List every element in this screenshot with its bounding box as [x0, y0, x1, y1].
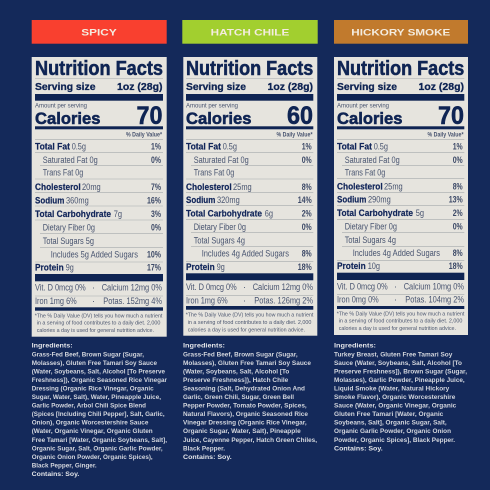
panel: spicy nutrition facts: 10%: [147, 249, 161, 259]
panel: hatch chile nutrition facts: Vit. D 0mcg 0%: [186, 282, 237, 292]
panel: spicy nutrition facts: [32, 57, 167, 337]
panel: spicy nutrition facts: Total Sugars 5g: [43, 236, 94, 246]
panel: hickory smoke nutrition facts: Total Fat: [337, 141, 372, 151]
panel: hickory smoke nutrition facts: 8%: [453, 248, 463, 258]
panel: spicy nutrition facts: 360mg: [66, 195, 89, 205]
panel: hatch chile nutrition facts: Total Fat: [186, 141, 221, 151]
panel: hatch chile nutrition facts: 320mg: [217, 195, 240, 205]
banner: hickory smoke: HICKORY SMOKE: [351, 28, 451, 39]
footnote: calories a day is used for general nutrition advice.: [37, 328, 154, 334]
panel: spicy nutrition facts: 17%: [147, 263, 161, 273]
panel: hatch chile nutrition facts: Amount per serving: [186, 104, 238, 110]
calories: 70: [136, 102, 162, 130]
serving size: 1oz (28g): [268, 81, 313, 93]
ingredients: spicy: [32, 343, 167, 478]
panel: hickory smoke nutrition facts: Total Carbohydrate: [337, 208, 413, 218]
banner: spicy: [32, 20, 167, 44]
ingredients: hickory smoke: Gluten Free Tamari [Water, Organic: [334, 411, 444, 418]
panel: hickory smoke nutrition facts: Trans Fat 0g: [345, 168, 385, 178]
panel: spicy nutrition facts: Trans Fat 0g: [43, 168, 83, 178]
panel: hickory smoke nutrition facts: 18%: [449, 261, 463, 271]
panel: hatch chile nutrition facts: Total Sugars 4g: [194, 235, 245, 245]
ingredients: hatch chile: Seasoning (Salt, Dehydrated Onion And: [183, 386, 305, 392]
panel: spicy nutrition facts: 9g: [66, 263, 74, 273]
ingredients: hickory smoke: Liquid Smoke (Water, Natural Hickory: [334, 386, 449, 392]
ingredients: spicy: Organic Onion Powder, Organic Spices),: [32, 454, 153, 461]
panel: hickory smoke nutrition facts: Saturated Fat 0g: [345, 155, 400, 165]
panel: hickory smoke nutrition facts: Vit. D 0mcg 0%: [337, 281, 388, 291]
panel: spicy nutrition facts: 1%: [151, 141, 161, 151]
panel: spicy nutrition facts: Cholesterol: [35, 182, 81, 192]
ingredients: hatch chile: Vinegar Dressing (Organic Rice Vinegar,: [183, 420, 307, 427]
calories: 70: [438, 102, 464, 130]
panel: spicy nutrition facts: Dietary Fiber 0g: [43, 223, 95, 233]
panel: spicy nutrition facts: Potas. 152mg 4%: [103, 296, 162, 306]
panel: hatch chile nutrition facts: Saturated Fat 0g: [194, 155, 249, 165]
ingredients: hatch chile: Molasses), Gluten Free Tamari Soy Sauce: [183, 360, 311, 367]
serving size: Serving size: [337, 81, 397, 93]
panel: spicy nutrition facts: 7%: [151, 182, 161, 192]
banner: spicy: SPICY: [81, 28, 117, 39]
panel: spicy nutrition facts: Calcium 12mg 0%: [102, 283, 162, 293]
ingredients: hatch chile: Organic Sugar, Water, Salt), Pineapple: [183, 428, 301, 435]
ingredients: hickory smoke: Powder, Organic Spices], Black Pepper.: [334, 437, 455, 444]
footnote: in a serving of food contributes to a daily diet. 2,000: [339, 319, 462, 325]
ingredients: hickory smoke: [334, 343, 467, 452]
calories: 60: [287, 102, 313, 130]
ingredients: hickory smoke: Molasses), Garlic Powder, Pineapple Juice,: [334, 377, 465, 384]
panel: hickory smoke nutrition facts: Dietary Fiber 0g: [345, 222, 397, 232]
ingredients: spicy: Freshness]), Organic Seasoned Rice Vinegar: [32, 377, 167, 384]
calories: [35, 102, 162, 130]
panel: spicy nutrition facts: Protein: [35, 263, 64, 273]
panel: hickory smoke nutrition facts: % Daily Value*: [428, 133, 464, 139]
panel: hatch chile nutrition facts: Dietary Fiber 0g: [194, 222, 246, 232]
panel: hatch chile nutrition facts: ·: [243, 295, 246, 305]
panel: hickory smoke nutrition facts: Total Sugars 4g: [345, 235, 396, 245]
panel: hickory smoke nutrition facts: 13%: [449, 195, 463, 205]
ingredients: spicy: Grass-Fed Beef, Brown Sugar (Sugar,: [32, 351, 144, 358]
panel: hatch chile nutrition facts: 1%: [302, 141, 312, 151]
banner: hatch chile: [182, 20, 318, 44]
panel: hickory smoke nutrition facts: [334, 57, 468, 335]
calories: [186, 102, 313, 130]
panel: hatch chile nutrition facts: 18%: [298, 262, 312, 272]
ingredients: hatch chile: Black Pepper.: [183, 445, 225, 452]
ingredients: hickory smoke: Preserve Freshness]), Brown Sugar (Sugar,: [334, 368, 467, 375]
panel: spicy nutrition facts: 0%: [151, 223, 161, 233]
ingredients: spicy: (Water, Organic Vinegar, Organic Gluten: [32, 428, 153, 435]
panel: hatch chile nutrition facts: 0%: [302, 155, 312, 165]
panel: hickory smoke nutrition facts: Protein: [337, 261, 366, 271]
ingredients: spicy: Contains: Soy.: [32, 471, 79, 478]
panel: hickory smoke nutrition facts: Calcium 10mg 0%: [404, 281, 464, 291]
panel: spicy nutrition facts: Includes 5g Added Sugars: [51, 249, 138, 259]
ingredients: spicy: Garlic Powder, Arbol Chili Spice Blend: [32, 403, 146, 410]
panel: hatch chile nutrition facts: Iron 1mg 6%: [186, 295, 228, 305]
panel: hatch chile nutrition facts: [183, 57, 317, 336]
ingredients: spicy: Sugar, Water, Salt), Water, Pineapple Juice,: [32, 394, 161, 401]
footnote: calories a day is used for general nutrition advice.: [339, 326, 456, 332]
ingredients: hatch chile: (Water, Soybeans, Salt, Alcohol [To: [183, 368, 289, 375]
ingredients: spicy: Dressing (Organic Rice Vinegar, Organic: [32, 386, 154, 392]
panel: spicy nutrition facts: Iron 1mg 6%: [35, 296, 77, 306]
panel: hickory smoke nutrition facts: Potas. 104mg 2%: [405, 295, 464, 305]
ingredients: spicy: Molasses), Gluten Free Tamari Soy Sauce: [32, 360, 157, 367]
panel: hatch chile nutrition facts: Potas. 126mg 2%: [254, 295, 313, 305]
panel: hatch chile nutrition facts: 9g: [217, 262, 225, 272]
footnote: [35, 313, 163, 334]
banner: hickory smoke: [334, 20, 468, 44]
panel: hatch chile nutrition facts: 8%: [302, 249, 312, 259]
footnote: *The % Daily Value (DV) tells you how much a nutrient: [186, 313, 314, 319]
panel: hickory smoke nutrition facts: Cholesterol: [337, 182, 383, 192]
panel: spicy nutrition facts: Total Fat: [35, 141, 70, 151]
ingredients: spicy: Organic Sugar, Salt, Organic Garlic Powder,: [32, 445, 163, 452]
nutrition facts heading: Nutrition Facts: [186, 58, 313, 80]
panel: hatch chile nutrition facts: ·: [243, 282, 246, 292]
ingredients: hatch chile: Juice, Cayenne Pepper, Hatch Green Chiles,: [183, 437, 317, 444]
panel: hickory smoke nutrition facts: 25mg: [384, 182, 403, 192]
panel: hatch chile nutrition facts: Total Carbohydrate: [186, 209, 262, 219]
ingredients: hickory smoke: Soybeans, Salt], Organic Sugar, Salt,: [334, 420, 447, 427]
ingredients: hatch chile: Preserve Freshness]), Hatch Chile: [183, 377, 289, 384]
footnote: calories a day is used for general nutrition advice.: [188, 328, 305, 334]
panel: hatch chile nutrition facts: 8%: [302, 182, 312, 192]
ingredients: hickory smoke: Organic Garlic Powder, Organic Onion: [334, 428, 451, 435]
footnote: in a serving of food contributes to a daily diet. 2,000: [188, 320, 311, 326]
nutrition facts heading: Nutrition Facts: [337, 58, 464, 80]
serving size: 1oz (28g): [418, 81, 464, 93]
panel: spicy nutrition facts: 16%: [147, 195, 161, 205]
ingredients: hatch chile: Ingredients:: [183, 343, 225, 350]
panel: hatch chile nutrition facts: Trans Fat 0g: [194, 168, 234, 178]
panel: hatch chile nutrition facts: 14%: [298, 195, 312, 205]
calories: Calories: [337, 109, 402, 128]
serving size: Serving size: [35, 81, 96, 93]
ingredients: hatch chile: Natural Flavors), Organic Seasoned Rice: [183, 411, 308, 418]
panel: spicy nutrition facts: ·: [92, 296, 95, 306]
nutrition facts heading: Nutrition Facts: [35, 58, 163, 80]
panel: hickory smoke nutrition facts: 10g: [368, 261, 380, 271]
panel: hickory smoke nutrition facts: 290mg: [368, 195, 391, 205]
panel: spicy nutrition facts: ·: [92, 283, 95, 293]
banner: hatch chile: HATCH CHILE: [211, 28, 290, 39]
footnote: *The % Daily Value (DV) tells you how much a nutrient: [337, 311, 465, 317]
ingredients: spicy: (Spices [Including Chili Pepper], Salt, Garlic,: [32, 411, 165, 418]
panel: spicy nutrition facts: Saturated Fat 0g: [43, 155, 98, 165]
ingredients: spicy: Free Tamari [Water, Organic Soybeans, Salt],: [32, 437, 167, 444]
panel: hickory smoke nutrition facts: Sodium: [337, 195, 366, 205]
panel: hickory smoke nutrition facts: Includes 4g Added Sugars: [353, 248, 440, 258]
panel: spicy nutrition facts: Total Carbohydrate: [35, 209, 111, 219]
panel: hatch chile nutrition facts: 2%: [302, 209, 312, 219]
ingredients: hickory smoke: Smoke Flavor), Organic Worcestershire: [334, 394, 455, 401]
panel: spicy nutrition facts: 0%: [151, 155, 161, 165]
panel: spicy nutrition facts: 7g: [114, 209, 122, 219]
panel: hatch chile nutrition facts: % Daily Value*: [276, 133, 313, 139]
footnote: *The % Daily Value (DV) tells you how much a nutrient: [35, 313, 163, 319]
ingredients: hatch chile: Pepper Powder, Tomato Powder, Spices,: [183, 403, 307, 410]
ingredients: spicy: Onion), Organic Worcestershire Sauce: [32, 420, 149, 427]
panel: hickory smoke nutrition facts: Amount per serving: [337, 104, 389, 110]
ingredients: hickory smoke: Contains: Soy.: [334, 445, 383, 452]
serving size: 1oz (28g): [117, 81, 162, 93]
panel: hickory smoke nutrition facts: ·: [394, 295, 397, 305]
panel: spicy nutrition facts: Vit. D 0mcg 0%: [35, 283, 86, 293]
calories: [337, 102, 464, 130]
serving size: [186, 81, 313, 93]
panel: hatch chile nutrition facts: 0%: [302, 222, 312, 232]
panel: hickory smoke nutrition facts: 0%: [453, 222, 463, 232]
panel: hatch chile nutrition facts: 6g: [265, 209, 273, 219]
panel: hatch chile nutrition facts: Sodium: [186, 195, 215, 205]
panel: spicy nutrition facts: 20mg: [82, 182, 101, 192]
panel: hickory smoke nutrition facts: 0%: [453, 155, 463, 165]
calories: Calories: [35, 109, 100, 128]
ingredients: spicy: (Water, Soybeans, Salt, Alcohol [To Preserve: [32, 368, 165, 375]
panel: hatch chile nutrition facts: Cholesterol: [186, 182, 232, 192]
panel: hickory smoke nutrition facts: Iron 0mg 0%: [337, 295, 379, 305]
panel: hatch chile nutrition facts: 0.5g: [223, 141, 237, 151]
calories: Calories: [186, 109, 252, 128]
ingredients: hickory smoke: Turkey Breast, Gluten Free Tamari Soy: [334, 351, 453, 358]
panel: hickory smoke nutrition facts: 5g: [416, 208, 424, 218]
ingredients: spicy: Ingredients:: [32, 343, 73, 350]
ingredients: hatch chile: Grass-Fed Beef, Brown Sugar (Sugar,: [183, 351, 298, 358]
panel: hickory smoke nutrition facts: 8%: [453, 182, 463, 192]
panel: spicy nutrition facts: Amount per serving: [35, 104, 87, 110]
panel: spicy nutrition facts: Sodium: [35, 195, 64, 205]
ingredients: hatch chile: Contains: Soy.: [183, 454, 232, 461]
panel: spicy nutrition facts: % Daily Value*: [126, 133, 163, 139]
footnote: [186, 313, 314, 334]
ingredients: hickory smoke: Ingredients:: [334, 343, 376, 350]
panel: hickory smoke nutrition facts: 0.5g: [374, 141, 388, 151]
serving size: [35, 81, 162, 93]
footnote: in a serving of food contributes to a daily diet. 2,000: [37, 321, 160, 327]
ingredients: hickory smoke: Sauce (Water, Organic Vinegar, Organic: [334, 403, 457, 410]
panel: hatch chile nutrition facts: Calcium 12mg 0%: [253, 282, 313, 292]
ingredients: hatch chile: Garlic, Green Chili, Sugar, Green Bell: [183, 394, 294, 401]
ingredients: hatch chile: [183, 343, 317, 461]
panel: spicy nutrition facts: 0.5g: [72, 141, 86, 151]
panel: hickory smoke nutrition facts: ·: [394, 281, 397, 291]
panel: spicy nutrition facts: 3%: [151, 209, 161, 219]
panel: hatch chile nutrition facts: Protein: [186, 262, 215, 272]
ingredients: hickory smoke: Sauce (Water, Soybeans, Salt, Alcohol [To: [334, 360, 462, 367]
serving size: Serving size: [186, 81, 246, 93]
serving size: [337, 81, 464, 93]
panel: hatch chile nutrition facts: Includes 4g Added Sugars: [202, 249, 289, 259]
panel: hickory smoke nutrition facts: 2%: [453, 208, 463, 218]
footnote: [337, 311, 465, 332]
panel: hickory smoke nutrition facts: 1%: [453, 141, 463, 151]
ingredients: spicy: Black Pepper, Ginger.: [32, 462, 97, 469]
panel: hatch chile nutrition facts: 25mg: [233, 182, 252, 192]
